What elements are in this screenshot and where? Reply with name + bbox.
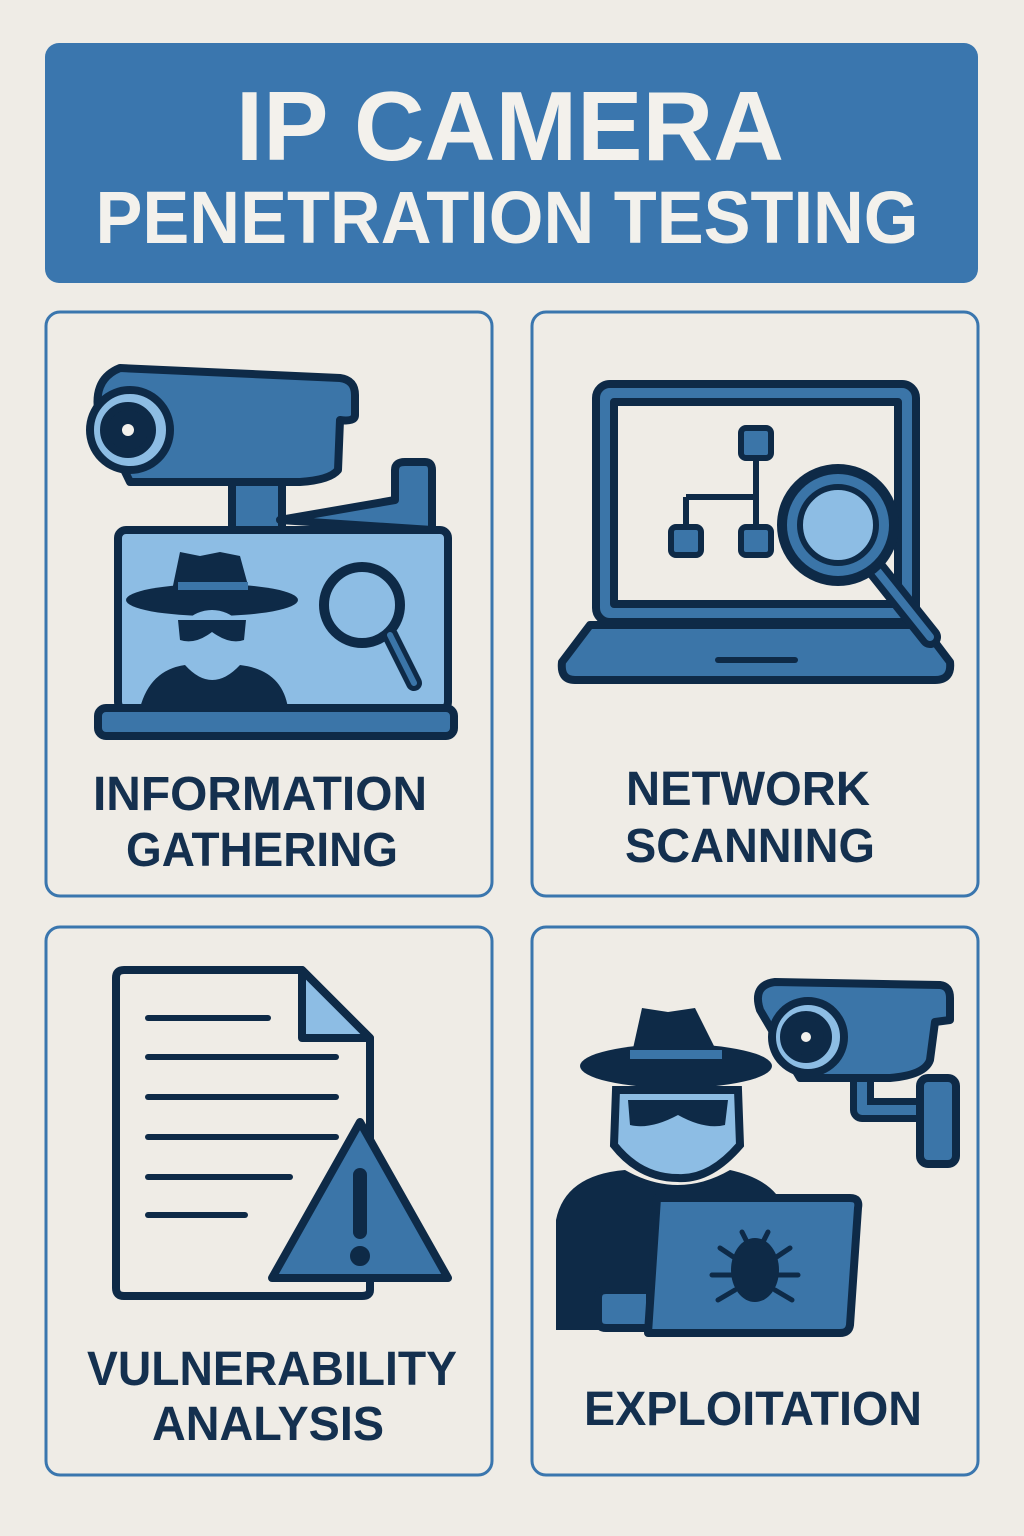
panel: network scanning <box>532 312 978 896</box>
label: information gathering: INFORMATION <box>93 768 427 821</box>
panel: exploitation <box>532 927 978 1475</box>
panel: information gathering <box>46 312 492 896</box>
icon: document with warning <box>116 970 448 1296</box>
label: network scanning: NETWORK <box>626 763 870 816</box>
label: network scanning <box>625 763 875 873</box>
icon: laptop with network and magnifier <box>562 384 950 680</box>
title banner: IP CAMERA <box>236 71 784 181</box>
label: vulnerability analysis: ANALYSIS <box>152 1398 384 1451</box>
panel: vulnerability analysis <box>46 927 492 1475</box>
label: network scanning: SCANNING <box>625 820 875 873</box>
title banner: PENETRATION TESTING <box>96 176 918 259</box>
icon: hacker with laptop and camera <box>758 982 956 1164</box>
label: vulnerability analysis: VULNERABILITY <box>87 1343 457 1396</box>
label: information gathering: GATHERING <box>126 824 398 877</box>
label: vulnerability analysis <box>87 1343 457 1451</box>
label: information gathering <box>93 768 427 877</box>
icon: camera and monitor with hacker <box>90 368 454 736</box>
title banner <box>45 43 978 283</box>
label: exploitation: EXPLOITATION <box>584 1383 922 1436</box>
